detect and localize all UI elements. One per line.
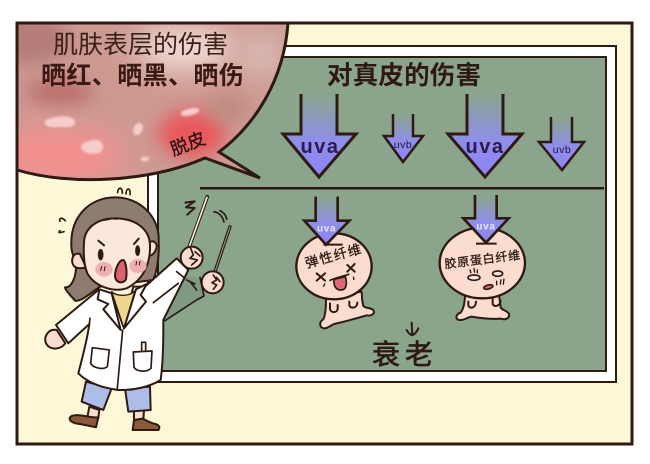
down arrow to ageing [407, 323, 418, 335]
back arm sleeve [163, 277, 203, 321]
heading: damage to dermis: 对真皮的伤害 [327, 62, 481, 90]
bubble subtitle: 晒红、晒黑、晒伤 [41, 62, 244, 90]
label: peeling: 脱皮 [168, 128, 208, 160]
arrow: uva 2 [448, 94, 522, 177]
character: elastic fibre [296, 197, 374, 328]
teacher figure [45, 188, 230, 430]
motion marks [59, 188, 227, 233]
label: elastic fibre: 弹性纤维 [304, 242, 363, 271]
lab coat [56, 258, 188, 390]
raised hand [181, 247, 203, 269]
ears [72, 241, 157, 268]
pointer: main [189, 197, 207, 248]
skin flakes [45, 107, 200, 162]
blackboard [148, 46, 616, 382]
divider line [200, 187, 604, 190]
back hand [202, 271, 224, 293]
mouth [115, 260, 127, 282]
eyes and brows [98, 239, 140, 271]
arrow: uva onto elastic fibre: uva [317, 223, 336, 234]
arrow: uva onto collagen fibre: uva [476, 221, 496, 232]
shoes [70, 415, 98, 427]
pockets [91, 342, 152, 371]
coat lapels and seams [98, 284, 147, 330]
label: collagen fibre: 胶原蛋白纤维 [444, 247, 521, 271]
cheeks [95, 259, 147, 277]
legs and trousers [70, 382, 159, 430]
speech bubble: skin surface damage [18, 24, 290, 182]
arrow: uvb 1: uvb [394, 139, 412, 151]
shirt [112, 291, 135, 328]
arrow: uva 1 [283, 94, 356, 177]
arrow: uvb 2: uvb [553, 144, 571, 156]
label: ageing: 衰老 [372, 339, 438, 370]
face [84, 218, 150, 290]
arrow: uva 1: uva [301, 136, 339, 158]
bubble title: 肌肤表层的伤害 [53, 31, 228, 59]
character: collagen fibre [440, 195, 525, 320]
arrow: uvb 1 [384, 114, 423, 162]
left hand [45, 330, 65, 349]
arrow: uva 2: uva [466, 136, 504, 158]
arrow: uvb 2 [539, 117, 584, 170]
pointer: moving ghost [215, 227, 230, 272]
hair [65, 197, 159, 301]
